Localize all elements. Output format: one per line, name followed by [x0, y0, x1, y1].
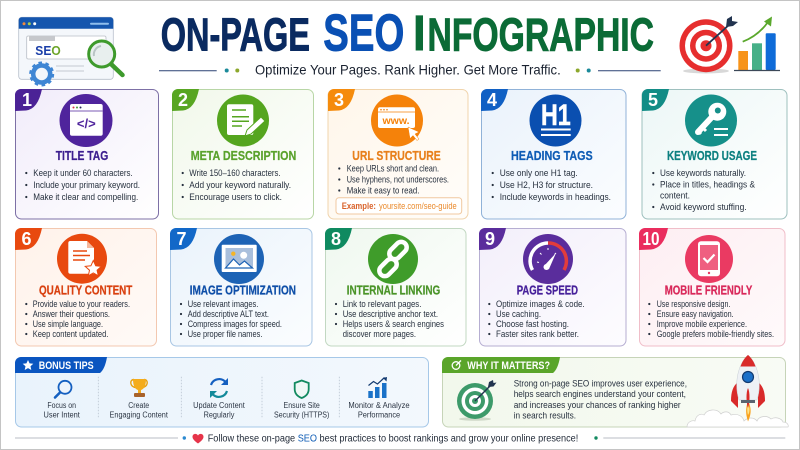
panel: 9 page speed — [479, 228, 626, 346]
panel: 2 meta description — [172, 89, 314, 219]
why it matters header tab — [442, 357, 560, 373]
bullet list: Add descriptive ALT text. — [188, 309, 269, 319]
number badge 9: 9 — [485, 229, 495, 249]
panel: 6 quality content — [15, 228, 156, 346]
bullet list: Include keywords in headings. — [500, 192, 611, 202]
tip: monitor and analyze performance — [348, 377, 410, 420]
number badge 1: 1 — [22, 90, 32, 110]
bullet list: Compress images for speed. — [188, 319, 282, 329]
number badge 7: 7 — [176, 229, 187, 249]
number badge 7 — [170, 228, 197, 250]
bullet list — [335, 299, 444, 339]
tagline: Optimize Your Pages. Rank Higher. Get More Traffic. — [255, 62, 561, 78]
number badge 3: 3 — [334, 90, 344, 110]
number badge 10 — [639, 228, 668, 250]
icon: picture — [214, 234, 264, 284]
icon: document with star — [57, 234, 107, 284]
panel: bonus tips — [15, 357, 428, 427]
icon: green target — [457, 380, 496, 421]
bonus tips header tab — [15, 357, 107, 373]
heading: HEADING TAGS — [511, 148, 593, 163]
icon: chain link — [368, 234, 418, 284]
bullet list: Link to relevant pages. — [343, 299, 421, 309]
bullet list: Make it clear and compelling. — [33, 192, 138, 202]
number badge 10: 10 — [642, 229, 660, 249]
bullet list: Choose fast hosting. — [496, 319, 569, 329]
bullet list: Faster sites rank better. — [496, 329, 579, 339]
panel: 10 mobile friendly — [639, 228, 785, 346]
bullet list — [492, 168, 611, 202]
tip: ensure site security: Ensure Site — [284, 401, 320, 410]
panel: 8 internal linking — [325, 228, 466, 346]
bonus tips header tab: BONUS TIPS — [39, 360, 94, 372]
heading: PAGE SPEED — [517, 283, 578, 298]
number badge 4: 4 — [487, 90, 497, 110]
bullet list: Use only one H1 tag. — [500, 168, 578, 178]
title: SEO — [323, 4, 404, 62]
panel: 7 image optimization — [170, 228, 312, 346]
icon: key — [685, 94, 737, 146]
heading: URL STRUCTURE — [352, 148, 441, 163]
panel: why it matters — [442, 355, 788, 427]
bullet list: discover more pages. — [343, 329, 416, 339]
bullet list: Use hyphens, not underscores. — [347, 174, 449, 184]
panel: 4 heading tags — [481, 89, 626, 219]
bullet list: Place in titles, headings & — [660, 180, 756, 190]
footer text: Follow these on-page SEO best practices to boost rankings and grow your online presence! — [208, 434, 578, 444]
number badge 5 — [642, 89, 669, 111]
icon: H1: H1 — [541, 99, 571, 132]
heading: MOBILE FRIENDLY — [665, 283, 753, 298]
bullet list: Use keywords naturally. — [660, 168, 746, 178]
bullet list: Use relevant images. — [188, 299, 258, 309]
heading: IMAGE OPTIMIZATION — [190, 283, 296, 298]
heading: QUALITY CONTENT — [39, 283, 132, 298]
number badge 5: 5 — [648, 90, 658, 110]
example callout — [336, 198, 462, 214]
number badge 6: 6 — [22, 229, 32, 249]
illustration: rocket — [731, 355, 765, 422]
icon: phone with check — [685, 235, 733, 283]
body text: helps search engines understand your content, — [514, 389, 686, 399]
number badge 1 — [15, 89, 42, 111]
tip: focus on user intent — [44, 381, 81, 420]
bullet list: Use caching. — [496, 309, 541, 319]
number badge 6 — [15, 228, 42, 250]
body text — [514, 378, 687, 420]
tip: update content regularly — [193, 378, 246, 420]
tip: create engaging content: Create — [128, 401, 150, 410]
bullet list: Avoid keyword stuffing. — [660, 202, 747, 212]
icon: speedometer — [523, 234, 573, 284]
tip: monitor and analyze performance: Performance — [358, 411, 401, 420]
number badge 4 — [481, 89, 508, 111]
body text: in search results. — [514, 410, 576, 420]
bullet list: Write 150–160 characters. — [189, 168, 281, 178]
tip: focus on user intent: Focus on — [47, 401, 76, 410]
tip: update content regularly: Update Content — [193, 401, 246, 410]
bullet list: Make it easy to read. — [347, 186, 419, 196]
illustration: clouds — [687, 410, 788, 427]
example callout: yoursite.com/seo-guide — [379, 201, 457, 211]
panel: 1 title tag — [15, 89, 158, 219]
bullet list: Keep it under 60 characters. — [33, 168, 133, 178]
icon: heart — [192, 434, 204, 444]
bullet list: Helps users & search engines — [343, 319, 444, 329]
tip: create engaging content: Engaging Content — [110, 411, 169, 420]
tip: ensure site security — [274, 380, 330, 420]
bullet list: Include your primary keyword. — [33, 180, 140, 190]
tip: ensure site security: Security (HTTPS) — [274, 411, 330, 420]
bullet list: Use H2, H3 for structure. — [500, 180, 593, 190]
icon: H1 — [530, 94, 582, 146]
why it matters header tab: WHY IT MATTERS? — [467, 360, 550, 372]
bullet list: Use proper file names. — [188, 329, 262, 339]
bullet list: Add your keyword naturally. — [189, 180, 291, 190]
bullet list: Answer their questions. — [33, 309, 110, 319]
bullet list: content. — [660, 190, 690, 200]
tip: focus on user intent: User Intent — [44, 411, 81, 420]
heading: META DESCRIPTION — [191, 148, 296, 163]
bullet list: Use descriptive anchor text. — [343, 309, 438, 319]
number badge 9 — [479, 228, 506, 250]
icon: www browser and cursor: www. — [381, 115, 410, 127]
number badge 2 — [172, 89, 199, 111]
footer message — [15, 434, 785, 444]
bullet list: Keep URLs short and clean. — [347, 164, 439, 174]
bullet list: Use responsive design. — [657, 299, 730, 309]
body text: Strong on-page SEO improves user experience, — [514, 378, 687, 388]
bullet list: Use simple language. — [33, 319, 103, 329]
bullet list — [180, 299, 282, 339]
heading: INTERNAL LINKING — [347, 283, 440, 298]
icon: document and pencil — [217, 94, 269, 146]
bullet list — [25, 299, 130, 339]
icon: code window: </> — [77, 116, 96, 131]
title: ON-PAGE — [161, 9, 310, 61]
panel: 3 url structure — [328, 89, 468, 219]
title: NFOGRAPHIC — [428, 8, 654, 60]
bullet list: Optimize images & code. — [496, 299, 585, 309]
number badge 2: 2 — [178, 90, 188, 110]
tip: create engaging content — [110, 379, 169, 420]
bullet list: Ensure easy navigation. — [657, 309, 734, 319]
bullet list — [648, 299, 774, 339]
example callout: Example: — [342, 201, 376, 211]
bullet list — [338, 164, 449, 196]
heading: KEYWORD USAGE — [667, 148, 757, 163]
icon: code window — [60, 94, 112, 147]
tip: monitor and analyze performance: Monitor & Analyze — [348, 401, 410, 410]
bullet list — [488, 299, 585, 339]
header illustration: target and growth chart — [680, 16, 780, 74]
title: I — [412, 4, 426, 61]
title — [161, 4, 654, 62]
body text: and increases your chances of ranking higher — [514, 400, 681, 410]
panel: 5 keyword usage — [642, 89, 787, 219]
header illustration: SEO browser window: SEO — [35, 43, 61, 58]
bullet list: Provide value to your readers. — [33, 299, 130, 309]
tagline — [159, 62, 661, 78]
bullet list: Improve mobile experience. — [657, 319, 747, 329]
tip: update content regularly: Regularly — [204, 411, 234, 420]
bullet list — [182, 168, 291, 202]
bullet list: Encourage users to click. — [189, 192, 282, 202]
header illustration: SEO browser window — [19, 17, 123, 85]
bullet list: Keep content updated. — [33, 329, 108, 339]
number badge 8: 8 — [331, 229, 341, 249]
bullet list — [652, 168, 756, 212]
heading: TITLE TAG — [56, 148, 108, 163]
number badge 8 — [325, 228, 352, 250]
bullet list — [25, 168, 140, 202]
